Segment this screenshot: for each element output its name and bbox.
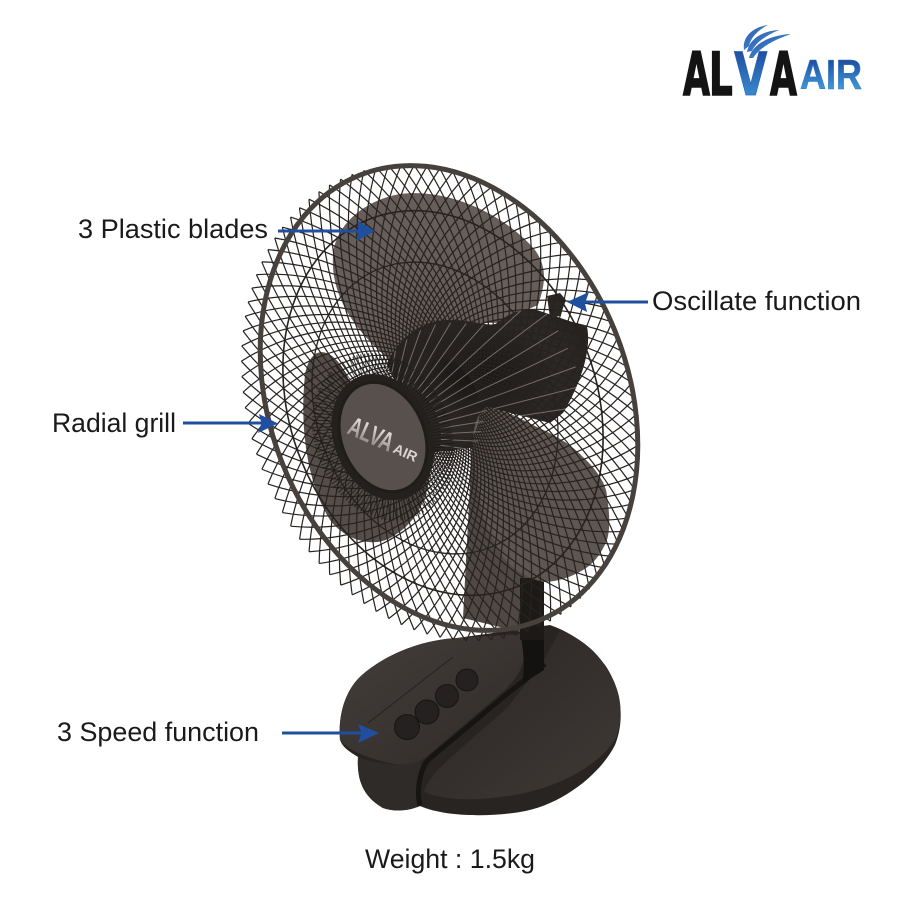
arrow <box>278 221 375 241</box>
button 1 <box>394 714 420 740</box>
callout: 3 speed function <box>57 717 379 747</box>
label: 3 Speed function <box>57 717 259 747</box>
hub radial ticks <box>302 346 464 528</box>
logo: Alva Air <box>683 25 862 110</box>
fan base <box>340 625 621 815</box>
button 2 <box>415 700 439 724</box>
hub logo: AIR: AIR <box>391 440 420 465</box>
callout: oscillate function <box>567 286 861 316</box>
grill spokes on motor <box>392 310 576 452</box>
panel front pod <box>358 757 422 810</box>
blade: right <box>473 407 609 582</box>
motor housing <box>387 310 588 453</box>
callout: radial grill <box>52 408 278 438</box>
hub logo: ALVA: ALVA <box>344 411 399 458</box>
logo wordmark: ALVA: A <box>683 39 710 110</box>
hub cap <box>321 367 445 507</box>
arrow <box>282 724 379 743</box>
logo wordmark: ALVA: L <box>709 40 733 109</box>
button 4 <box>456 669 478 691</box>
grill support rings <box>227 162 659 644</box>
button 3 <box>436 684 458 708</box>
grill rim <box>193 108 705 688</box>
base silhouette <box>340 625 621 815</box>
blade: top <box>333 193 544 362</box>
arrow <box>567 292 648 312</box>
buttons <box>394 669 478 740</box>
oscillate knob <box>547 293 566 318</box>
label: 3 Plastic blades <box>78 214 268 244</box>
hub surround <box>313 358 453 516</box>
weight caption: Weight : 1.5kg <box>365 844 535 874</box>
label: Oscillate function <box>652 286 861 316</box>
panel seam <box>368 657 453 723</box>
fan product illustration <box>241 163 640 816</box>
fan column <box>463 445 544 640</box>
logo wordmark: ALVA: A <box>770 39 797 110</box>
arrow <box>183 414 278 433</box>
blade: left <box>303 352 430 542</box>
base top surface <box>424 630 621 799</box>
logo wordmark: ALVA: V <box>734 40 768 110</box>
label: Radial grill <box>52 408 176 438</box>
neck <box>520 625 544 684</box>
logo wordmark: AIR: AIR <box>800 51 862 98</box>
grill mesh <box>70 13 810 793</box>
logo wordmark: ALVA <box>683 39 797 110</box>
column dark strip <box>520 578 544 640</box>
callout: 3 plastic blades <box>78 214 375 244</box>
control panel <box>340 634 524 764</box>
panel edge groove <box>418 664 545 806</box>
icon: logo wing swoosh <box>744 25 791 58</box>
